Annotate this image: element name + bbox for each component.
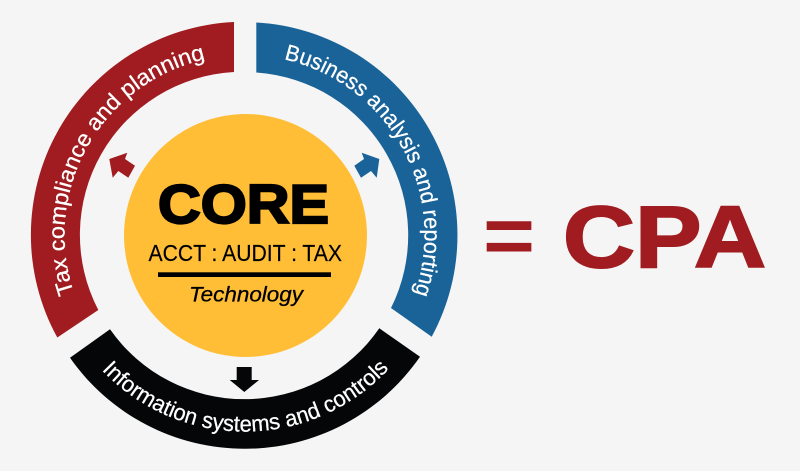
technology: Technology: [189, 282, 304, 306]
label: information systems and controls: Information systems and controls: [102, 360, 388, 434]
segment: information systems and controls: [70, 328, 420, 449]
arrow: to information systems: [230, 367, 259, 392]
equals sign: =: [483, 191, 535, 280]
segment: business analysis and reporting: [256, 22, 458, 337]
core circle: [124, 114, 367, 357]
subjects: ACCT : AUDIT : TAX: [148, 240, 342, 266]
result: CPA: CPA: [563, 189, 766, 286]
label: tax compliance and planning: Tax compliance and planning: [52, 48, 204, 297]
arrow: to business: [354, 153, 379, 178]
label: business analysis and reporting: Business analysis and reporting: [286, 44, 438, 296]
heading: core: CORE: [158, 173, 329, 235]
segment: tax compliance and planning: [30, 22, 234, 338]
divider line: [158, 272, 331, 277]
arrow: to tax: [109, 153, 135, 178]
